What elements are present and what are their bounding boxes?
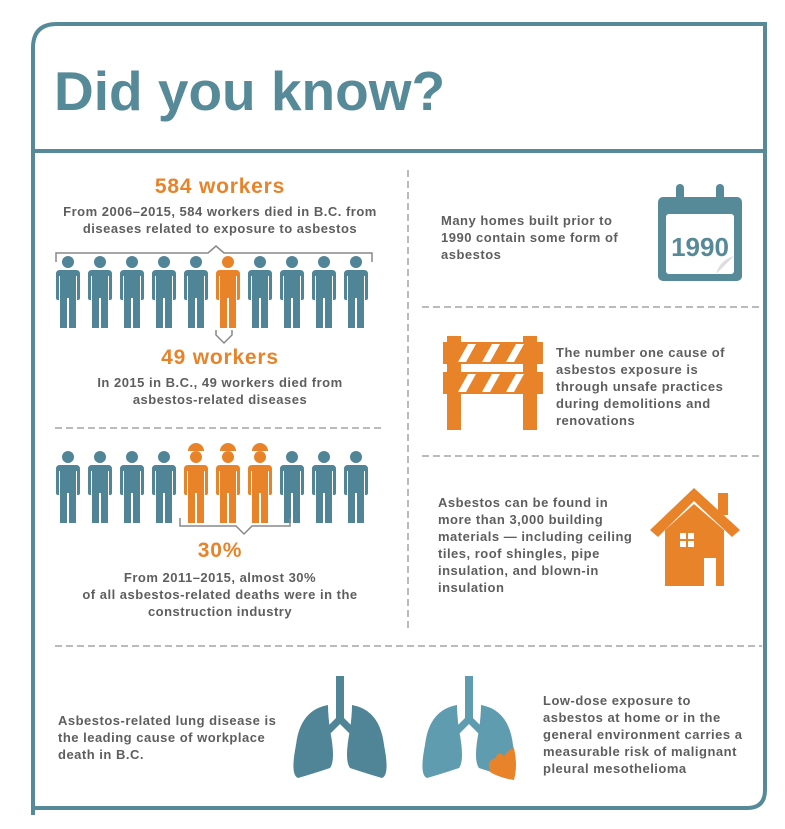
text: asbestos-related diseases [133,392,307,407]
text demolitions: The number one cause of [556,345,725,360]
text materials: tiles, roof shingles, pipe [438,546,600,561]
text mesothelioma: Low-dose exposure to [543,693,691,708]
text mesothelioma: asbestos at home or in the [543,710,721,725]
text lung disease: death in B.C. [58,747,144,762]
text 1990: Many homes built prior to [441,213,612,228]
text: From 2011–2015, almost 30% [124,570,316,585]
text: diseases related to exposure to asbestos [83,221,357,236]
text materials: more than 3,000 building [438,512,603,527]
text: In 2015 in B.C., 49 workers died from [97,375,343,390]
text demolitions: asbestos exposure is [556,362,698,377]
text demolitions: renovations [556,413,635,428]
text materials [438,495,632,595]
icon: lungs healthy [293,676,387,778]
text lung disease [58,713,276,762]
stat 584: 584 workers [155,175,285,198]
text demolitions: through unsafe practices [556,379,723,394]
people row 2 [56,443,368,523]
icon: calendar [658,184,742,281]
text: construction industry [148,604,292,619]
bracket top [56,246,372,262]
text mesothelioma: pleural mesothelioma [543,761,687,776]
text 1990: asbestos [441,247,501,262]
text materials: Asbestos can be found in [438,495,608,510]
text mesothelioma [543,693,742,776]
text: From 2006–2015, 584 workers died in B.C. from [63,204,377,219]
text mesothelioma: measurable risk of malignant [543,744,737,759]
text demolitions: during demolitions and [556,396,711,411]
text demolitions [556,345,725,428]
text materials: insulation, and blown-in [438,563,599,578]
stat 30%: 30% [198,539,242,562]
text lung disease: Asbestos-related lung disease is [58,713,276,728]
text 1990 [441,213,618,262]
text mesothelioma: general environment carries a [543,727,742,742]
icon: calendar: 1990 [671,232,729,262]
people row 1 [56,256,368,328]
icon: house [650,488,740,586]
text lung disease: the leading cause of workplace [58,730,265,745]
text: of all asbestos-related deaths were in the [82,587,358,602]
title: Did you know? [54,60,445,122]
text 1990: 1990 contain some form of [441,230,618,245]
text materials: insulation [438,580,504,595]
icon: barricade [443,336,543,430]
stat 49: 49 workers [161,346,279,369]
text materials: materials — including ceiling [438,529,632,544]
icon: lungs diseased [422,676,516,780]
